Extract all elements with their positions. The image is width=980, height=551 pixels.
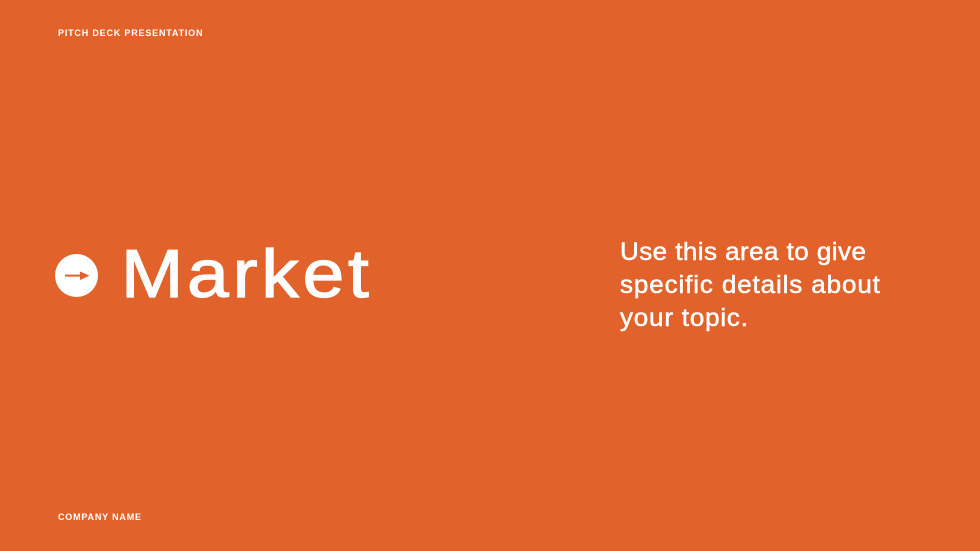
description text: your topic. [620,304,749,332]
description text: Use this area to give [620,238,866,266]
footer label: COMPANY NAME [58,512,141,522]
description text: specific details about [620,271,881,299]
icon: arrow in circle [55,254,98,297]
header label: PITCH DECK PRESENTATION [58,28,202,38]
title: Market [121,236,373,312]
description text [620,238,881,332]
